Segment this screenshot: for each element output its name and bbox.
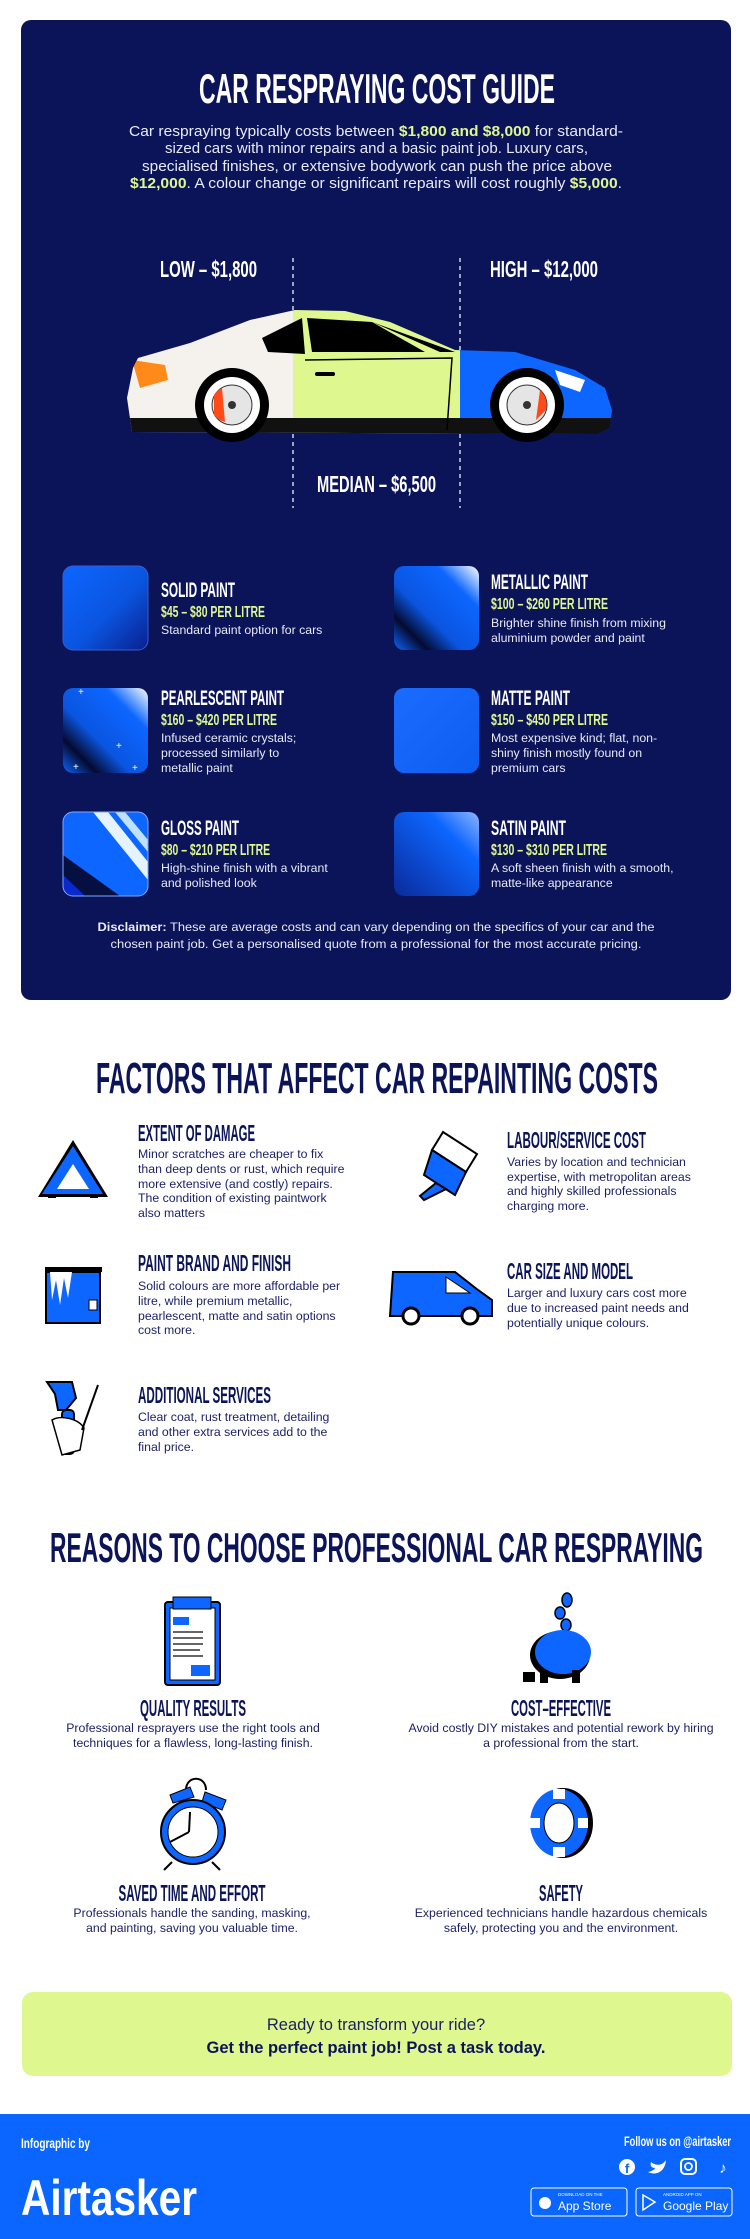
button: App Store: App Store (558, 2199, 612, 2213)
factor: paint brand: litre, while premium metallic, (138, 1294, 292, 1308)
call to action: Get the perfect paint job! Post a task today. (207, 2039, 545, 2057)
reason: quality results: Professional resprayers use the right tools and (66, 1721, 320, 1735)
card: pearlescent paint: processed similarly to (161, 746, 279, 760)
reason: cost-effective: COST–EFFECTIVE (511, 1695, 611, 1721)
reason: quality results: techniques for a flawless, long-lasting finish. (73, 1736, 313, 1750)
card: gloss paint: $80 – $210 PER LITRE (161, 842, 270, 859)
icon: paint brush (420, 1132, 477, 1200)
card: satin paint (394, 812, 674, 896)
footer (0, 2114, 750, 2239)
disclaimer (98, 920, 655, 951)
factor: car size (390, 1258, 689, 1330)
factor: car size: potentially unique colours. (507, 1316, 649, 1330)
factor: extent of damage: Minor scratches are cheaper to fix (138, 1147, 324, 1161)
factor: labour/service cost (420, 1127, 691, 1213)
icon: alarm clock (161, 1779, 226, 1870)
footer: Infographic by (21, 2135, 90, 2151)
factor: labour/service cost: charging more. (507, 1199, 589, 1213)
card: metallic paint: METALLIC PAINT (491, 571, 588, 594)
card: pearlescent paint: Infused ceramic crystals; (161, 731, 296, 745)
card: satin paint: SATIN PAINT (491, 817, 566, 840)
factor: extent of damage (38, 1120, 345, 1220)
factor: additional services (47, 1382, 330, 1455)
card: solid paint (63, 566, 322, 650)
label: high price: HIGH – $12,000 (490, 256, 598, 282)
reason: cost-effective: a professional from the start. (483, 1736, 639, 1750)
icon: piggy bank with coins (523, 1593, 591, 1683)
factor: additional services: Clear coat, rust treatment, detailing (138, 1410, 330, 1424)
intro paragraph (129, 124, 623, 192)
icons: social: ♪ (719, 2160, 727, 2177)
card: solid paint: SOLID PAINT (161, 579, 235, 602)
reason: saved time: Professionals handle the sanding, masking, (73, 1906, 311, 1920)
factor: paint brand: Solid colours are more affordable per (138, 1279, 340, 1293)
factor: additional services: final price. (138, 1440, 194, 1454)
button: Google Play: Google Play (663, 2199, 728, 2213)
icons: social (619, 2159, 727, 2177)
card: gloss paint (63, 812, 328, 896)
factor: car size: Larger and luxury cars cost more (507, 1286, 687, 1300)
card: pearlescent paint: metallic paint (161, 761, 233, 775)
card: gloss paint: High-shine finish with a vibrant (161, 861, 328, 875)
factor: extent of damage: more extensive (and costly) repairs. (138, 1177, 333, 1191)
illustration: car (120, 300, 620, 442)
card: pearlescent paint: + (132, 763, 138, 774)
factor: additional services: ADDITIONAL SERVICES (138, 1382, 271, 1408)
card: pearlescent paint (63, 687, 296, 775)
factor: paint brand: pearlescent, matte and satin options (138, 1309, 336, 1323)
logo: Airtasker: Airtasker (21, 2170, 197, 2226)
factor: labour/service cost: expertise, with metropolitan areas (507, 1170, 691, 1184)
icons: social: f (625, 2161, 630, 2176)
card: pearlescent paint: + (78, 687, 84, 698)
button: Google Play (636, 2188, 732, 2216)
reason: safety: Experienced technicians handle hazardous chemicals (415, 1906, 707, 1920)
card: matte paint: $150 – $450 PER LITRE (491, 712, 608, 729)
card: gloss paint: and polished look (161, 876, 258, 890)
reason: quality results (66, 1597, 320, 1750)
reason: saved time: SAVED TIME AND EFFORT (118, 1880, 266, 1906)
card: solid paint: Standard paint option for cars (161, 623, 322, 637)
card: metallic paint: aluminium powder and paint (491, 631, 645, 645)
card: pearlescent paint: + (116, 741, 122, 752)
icon: van (390, 1272, 492, 1324)
card: satin paint: matte-like appearance (491, 876, 613, 890)
reason: cost-effective (408, 1593, 714, 1750)
call to action (22, 1992, 732, 2076)
card: matte paint: shiny finish mostly found on (491, 746, 642, 760)
factor: paint brand (45, 1250, 340, 1337)
factor: labour/service cost: Varies by location and technician (507, 1155, 686, 1169)
card: matte paint: premium cars (491, 761, 565, 775)
factor: labour/service cost: and highly skilled professionals (507, 1184, 677, 1198)
icon: hand with brush (47, 1382, 98, 1455)
card: matte paint (394, 687, 657, 775)
label: low price: LOW – $1,800 (160, 256, 257, 282)
factor: additional services: and other extra services add to the (138, 1425, 328, 1439)
panel: cost guide (21, 20, 731, 1000)
reason: safety (415, 1788, 707, 1935)
reason: quality results: QUALITY RESULTS (140, 1695, 246, 1721)
reason: saved time: and painting, saving you valuable time. (86, 1921, 298, 1935)
card: pearlescent paint: $160 – $420 PER LITRE (161, 712, 277, 729)
label: median price: MEDIAN – $6,500 (317, 471, 436, 497)
icon: clipboard (165, 1597, 220, 1685)
reason: safety: safely, protecting you and the environment. (444, 1921, 678, 1935)
reason: cost-effective: Avoid costly DIY mistakes and potential rework by hiring (408, 1721, 714, 1735)
card: pearlescent paint: + (73, 762, 79, 773)
wheels (195, 368, 269, 442)
icon: paint can (45, 1267, 102, 1323)
factor: extent of damage: than deep dents or rust, which require (138, 1162, 345, 1176)
card: pearlescent paint: PEARLESCENT PAINT (161, 687, 284, 710)
icon: lifebuoy (530, 1788, 593, 1858)
icon: warning triangle (38, 1140, 108, 1198)
factor: paint brand: PAINT BRAND AND FINISH (138, 1250, 291, 1276)
card: solid paint: $45 – $80 PER LITRE (161, 604, 265, 621)
button: App Store: DOWNLOAD ON THE (558, 2192, 603, 2197)
factor: extent of damage: EXTENT OF DAMAGE (138, 1120, 255, 1146)
button: Google Play: ANDROID APP ON (663, 2192, 702, 2197)
button: App Store (531, 2188, 627, 2216)
card: metallic paint: Brighter shine finish from mixing (491, 616, 666, 630)
card: matte paint: MATTE PAINT (491, 687, 570, 710)
reason: safety: SAFETY (539, 1880, 583, 1906)
card: matte paint: Most expensive kind; flat, non- (491, 731, 657, 745)
card: metallic paint (394, 566, 666, 650)
card: metallic paint: $100 – $260 PER LITRE (491, 596, 608, 613)
disclaimer: Disclaimer: These are average costs and can vary depending on the specifics of your car and the (98, 920, 655, 934)
card: gloss paint: GLOSS PAINT (161, 817, 239, 840)
factor: extent of damage: The condition of existing paintwork (138, 1191, 328, 1205)
intro paragraph: $12,000 . A colour change or significant repairs will cost roughly $5,000. (130, 176, 622, 192)
disclaimer: chosen paint job. Get a personalised quote from a professional for the most accurate pricing. (110, 937, 642, 951)
intro paragraph: sized cars with minor repairs and a basic paint job. Luxury cars, (165, 141, 588, 157)
card: satin paint: $130 – $310 PER LITRE (491, 842, 607, 859)
card: satin paint: A soft sheen finish with a smooth, (491, 861, 674, 875)
factor: paint brand: cost more. (138, 1323, 195, 1337)
factor: car size: due to increased paint needs and (507, 1301, 689, 1315)
reason: saved time (73, 1779, 311, 1935)
call to action: Ready to transform your ride? (267, 2016, 485, 2034)
intro paragraph: specialised finishes, or extensive bodywork can push the price above (142, 159, 612, 175)
intro paragraph: Car respraying typically costs between $1,800 and $8,000 for standard- (129, 124, 623, 140)
factor: extent of damage: also matters (138, 1206, 205, 1220)
